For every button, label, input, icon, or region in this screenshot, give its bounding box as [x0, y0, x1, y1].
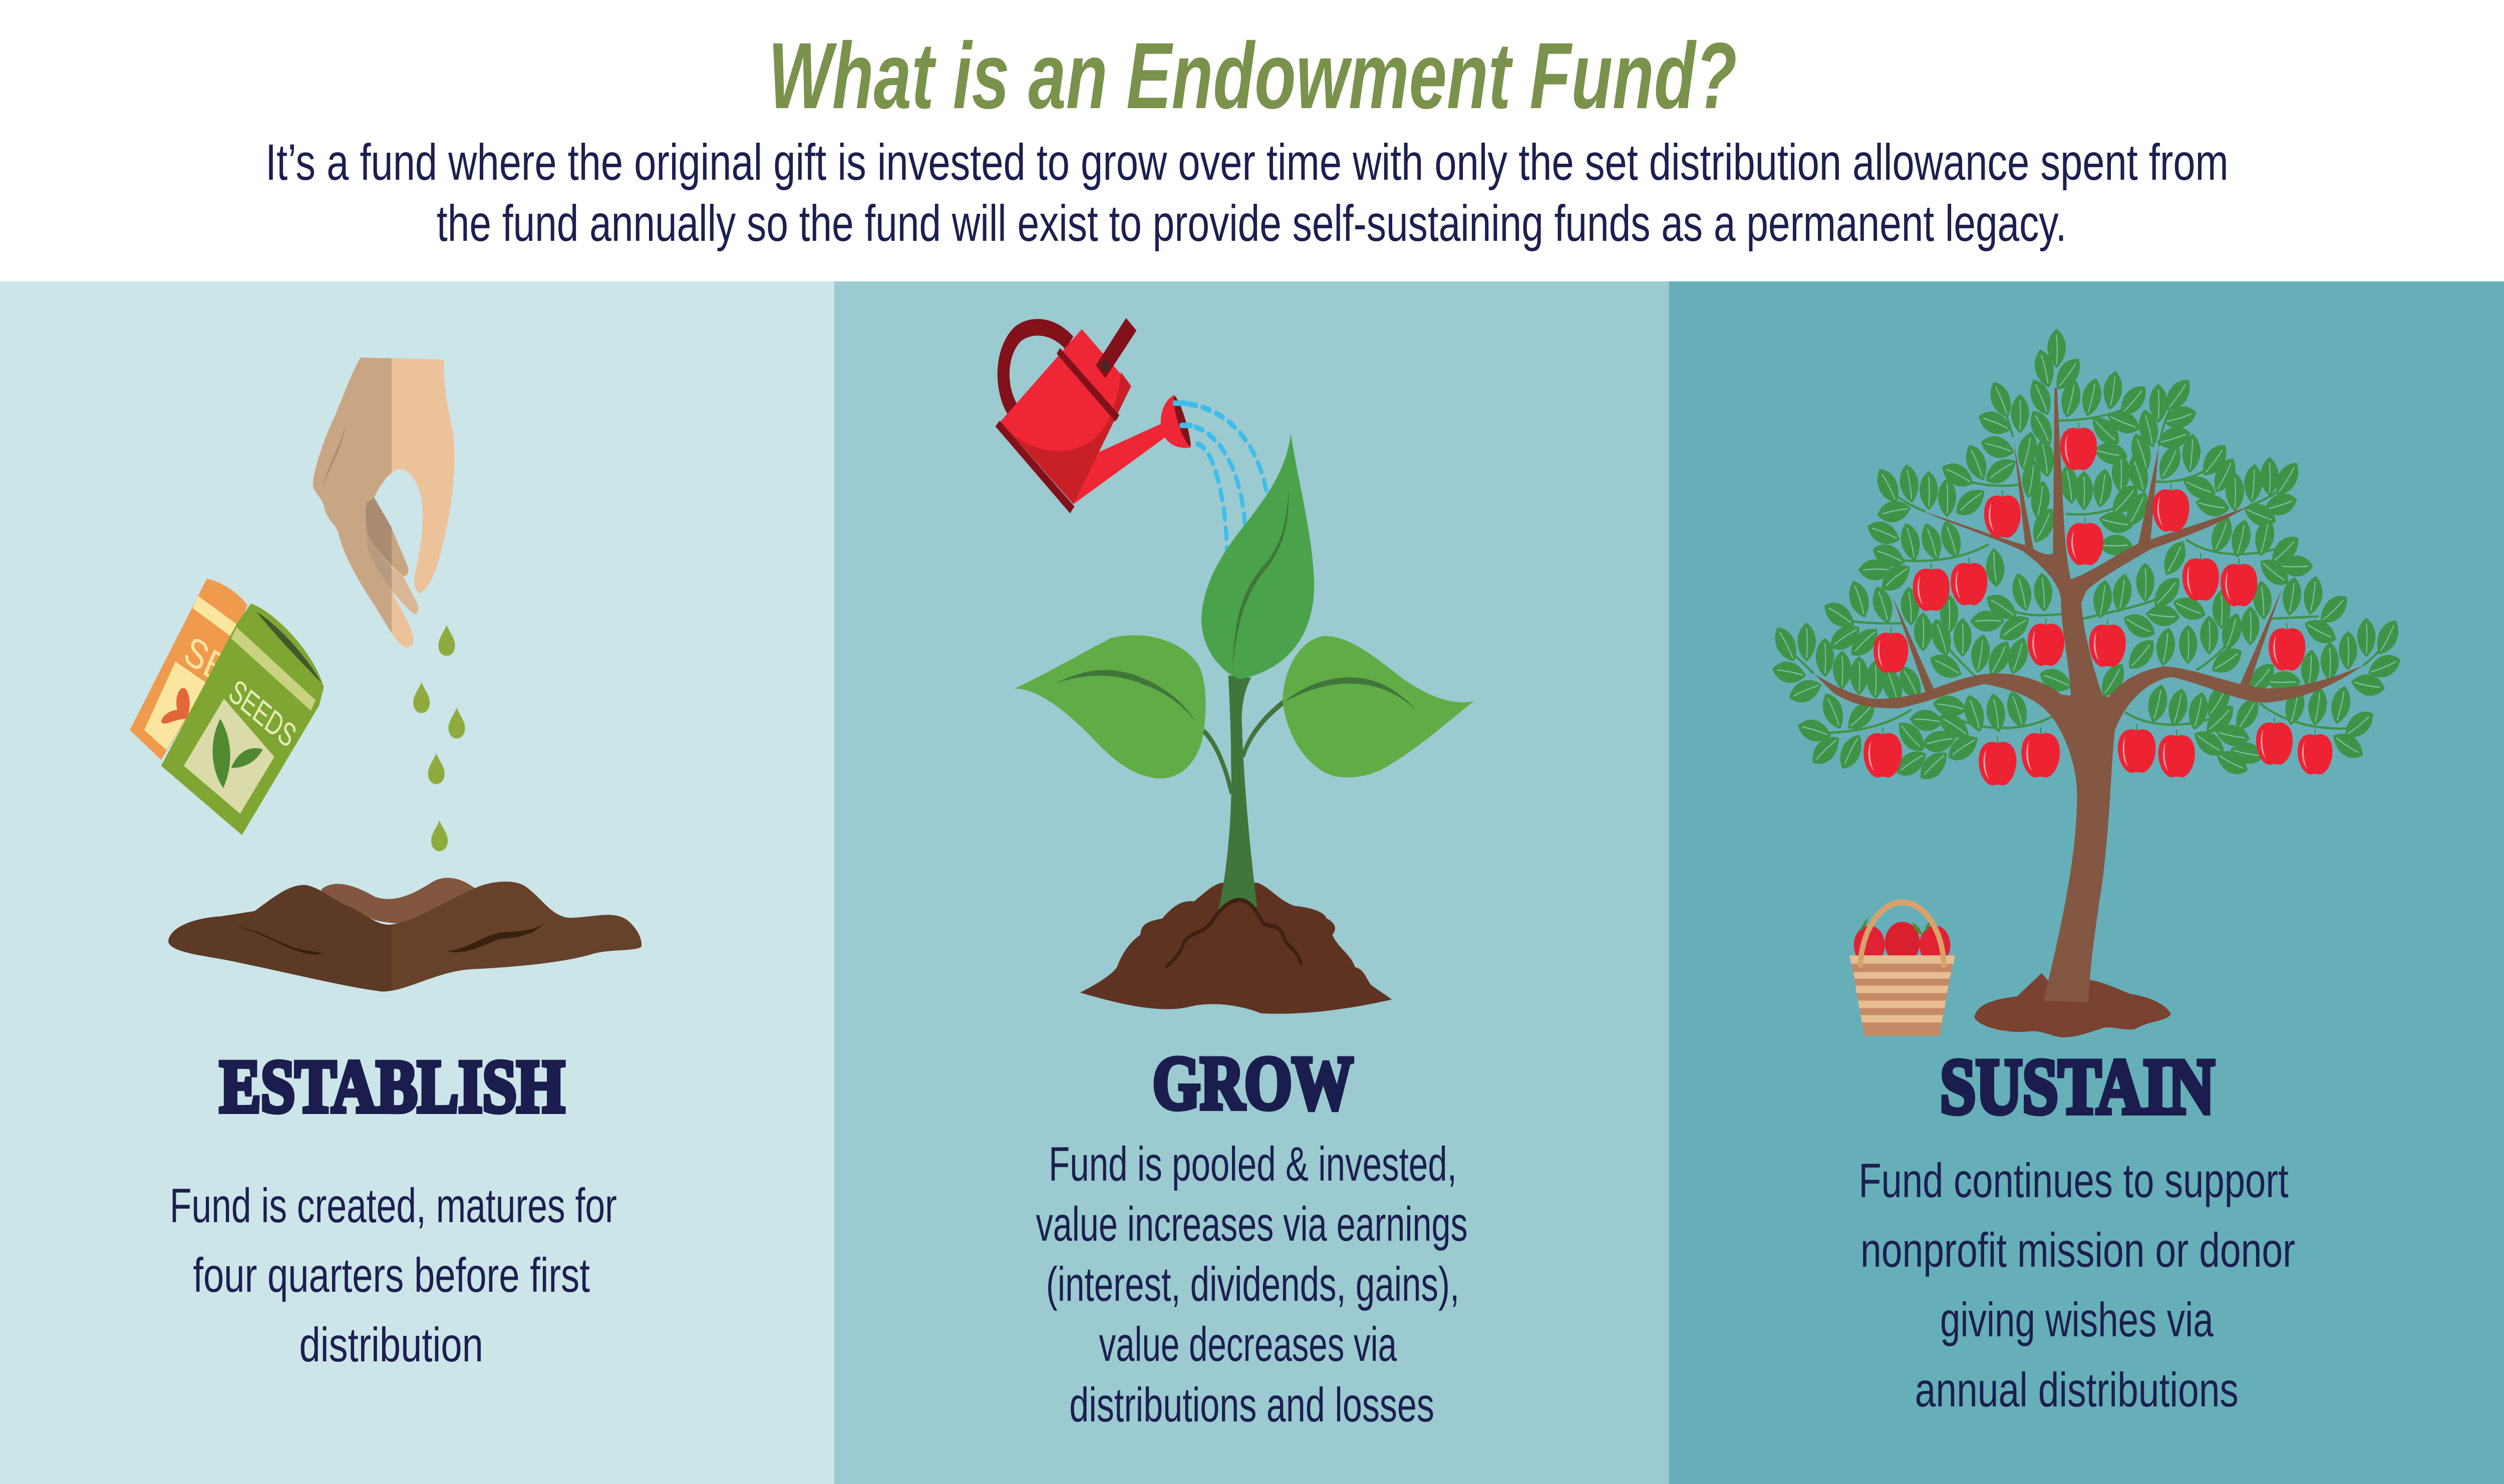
- header background: [0, 0, 2504, 281]
- icon: orange seed packet: [130, 579, 247, 760]
- grow description: Fund is pooled & invested,: [1049, 1137, 1457, 1191]
- icon: water streams: [1175, 403, 1267, 553]
- icon: apples on tree: [1863, 423, 2333, 786]
- illustration: watering can and seedling: [995, 318, 1474, 1014]
- panel: grow: [834, 281, 1669, 1484]
- sustain description: annual distributions: [1915, 1363, 2239, 1417]
- sustain description: nonprofit mission or donor: [1860, 1223, 2295, 1277]
- intro text: the fund annually so the fund will exist to provide self-sustaining funds as a permanent legacy.: [437, 195, 2067, 252]
- icon: green seed packet: SEEDS: [223, 672, 301, 755]
- icon: tree twigs: [1783, 400, 2392, 733]
- establish description: [170, 1179, 617, 1372]
- sustain background: [1669, 281, 2504, 1484]
- grow description: distributions and losses: [1069, 1378, 1434, 1432]
- grow description: (interest, dividends, gains),: [1046, 1257, 1459, 1311]
- icon: falling seeds: [413, 625, 465, 851]
- grow description: value increases via earnings: [1036, 1197, 1468, 1251]
- establish description: distribution: [299, 1318, 483, 1372]
- icon: apple basket: [1849, 902, 1955, 1036]
- intro text: It’s a fund where the original gift is invested to grow over time with only the set distribution allowance spent from: [265, 134, 2229, 191]
- icon: soil mound: [1080, 883, 1392, 1014]
- illustration: apple tree and basket: [1769, 329, 2404, 1037]
- illustration: hand sowing seeds: [130, 357, 642, 991]
- panel: sustain: [1669, 281, 2504, 1484]
- intro text: [265, 134, 2229, 252]
- icon: hand: [313, 357, 454, 647]
- sustain description: [1858, 1154, 2295, 1417]
- icon: orange seed packet: SE: [178, 627, 234, 693]
- icon: green seed packet: [161, 603, 324, 835]
- icon: watering can: [995, 318, 1191, 513]
- sustain description: Fund continues to support: [1858, 1154, 2289, 1208]
- establish description: Fund is created, matures for: [170, 1179, 617, 1233]
- grow background: [834, 281, 1669, 1484]
- icon: soil mound: [168, 878, 642, 991]
- heading: establish: ESTABLISH: [220, 1044, 565, 1128]
- panel: establish: [0, 281, 834, 1484]
- grow description: value decreases via: [1099, 1317, 1397, 1371]
- establish description: four quarters before first: [193, 1248, 590, 1302]
- heading: sustain: SUSTAIN: [1940, 1043, 2215, 1131]
- grow description: [1036, 1137, 1468, 1432]
- title: What is an Endowment Fund?: [768, 24, 1737, 129]
- sustain description: giving wishes via: [1940, 1293, 2214, 1347]
- icon: seedling: [1015, 434, 1474, 967]
- heading: grow: GROW: [1153, 1041, 1353, 1126]
- icon: tree soil: [1974, 973, 2171, 1037]
- establish background: [0, 281, 834, 1484]
- icon: tree leaves: [1769, 329, 2404, 786]
- icon: tree trunk and branches: [1813, 388, 2363, 1002]
